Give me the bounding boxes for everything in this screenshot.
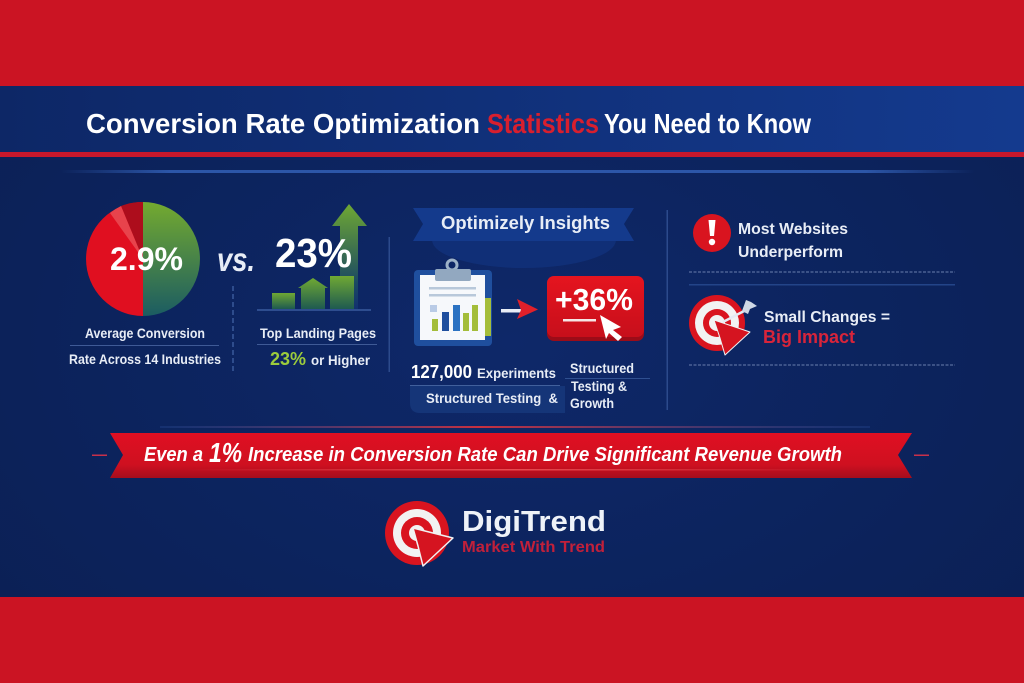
caption: average conversion xyxy=(69,325,221,367)
text: most websites underperform: Most Websites xyxy=(738,221,848,238)
bottom red band xyxy=(0,597,1024,683)
pie chart: 2.9% xyxy=(86,202,200,316)
banner: 1% increase: Increase in Conversion Rate Can Drive Significant Revenue Growth xyxy=(248,444,842,466)
text: most websites underperform: Underperform xyxy=(738,244,843,261)
text: small changes big impact xyxy=(763,309,890,347)
caption: experiments: 127,000 xyxy=(411,362,472,382)
banner: 1% increase xyxy=(92,433,929,478)
stat button: +36% xyxy=(547,276,644,341)
panel: average versus top landing pages xyxy=(69,202,377,372)
panel: key takeaways xyxy=(689,214,955,365)
caption: top landing pages: 23% xyxy=(270,349,306,369)
text: small changes big impact: Small Changes = xyxy=(764,309,890,326)
title: Statistics xyxy=(487,108,599,139)
growth chart: bars and arrow xyxy=(257,204,371,311)
ribbon heading: Optimizely Insights xyxy=(441,213,610,233)
stat button: +36%: +36% xyxy=(555,282,633,317)
logo: DigiTrend: DigiTrend xyxy=(462,506,606,538)
caption: structured testing and growth: Structured xyxy=(570,360,634,376)
title: You Need to Know xyxy=(604,108,811,139)
banner: 1% increase: 1% xyxy=(209,437,242,468)
logo: DigiTrend xyxy=(385,501,606,566)
icon: cursor xyxy=(600,315,622,341)
banner: 1% increase: Even a xyxy=(144,444,203,466)
text: most websites underperform xyxy=(738,221,848,261)
stat: 23%: 23% xyxy=(275,230,352,276)
caption: experiments xyxy=(410,362,565,413)
ribbon heading xyxy=(413,208,634,241)
top red band xyxy=(0,0,1024,86)
caption: average conversion: Rate Across 14 Industries xyxy=(69,351,221,367)
icon: exclamation mark xyxy=(693,214,731,252)
caption: average conversion: Average Conversion xyxy=(85,325,205,341)
caption: top landing pages: or Higher xyxy=(311,352,371,368)
caption: experiments: Experiments xyxy=(477,365,556,381)
vs label: vs. xyxy=(217,241,255,278)
title xyxy=(86,108,811,139)
panel: Optimizely insights xyxy=(410,208,650,413)
header panel xyxy=(0,86,1024,157)
caption: experiments: Structured Testing & xyxy=(426,390,558,406)
caption: structured testing and growth: Testing & xyxy=(571,378,627,394)
icon: clipboard with bar chart xyxy=(414,260,492,346)
caption: top landing pages: Top Landing Pages xyxy=(260,325,376,341)
arrow: to result xyxy=(501,299,538,319)
caption: structured testing and growth xyxy=(565,360,650,411)
text: small changes big impact: Big Impact xyxy=(763,327,855,347)
title: Conversion Rate Optimization xyxy=(86,108,480,139)
icon: target with arrow xyxy=(689,295,757,355)
pie chart: 2.9%: 2.9% xyxy=(110,241,183,277)
caption: structured testing and growth: Growth xyxy=(570,395,614,411)
caption: top landing pages xyxy=(257,325,377,369)
logo: DigiTrend: Market With Trend xyxy=(462,539,605,556)
icon: logo target and plane xyxy=(385,501,453,566)
